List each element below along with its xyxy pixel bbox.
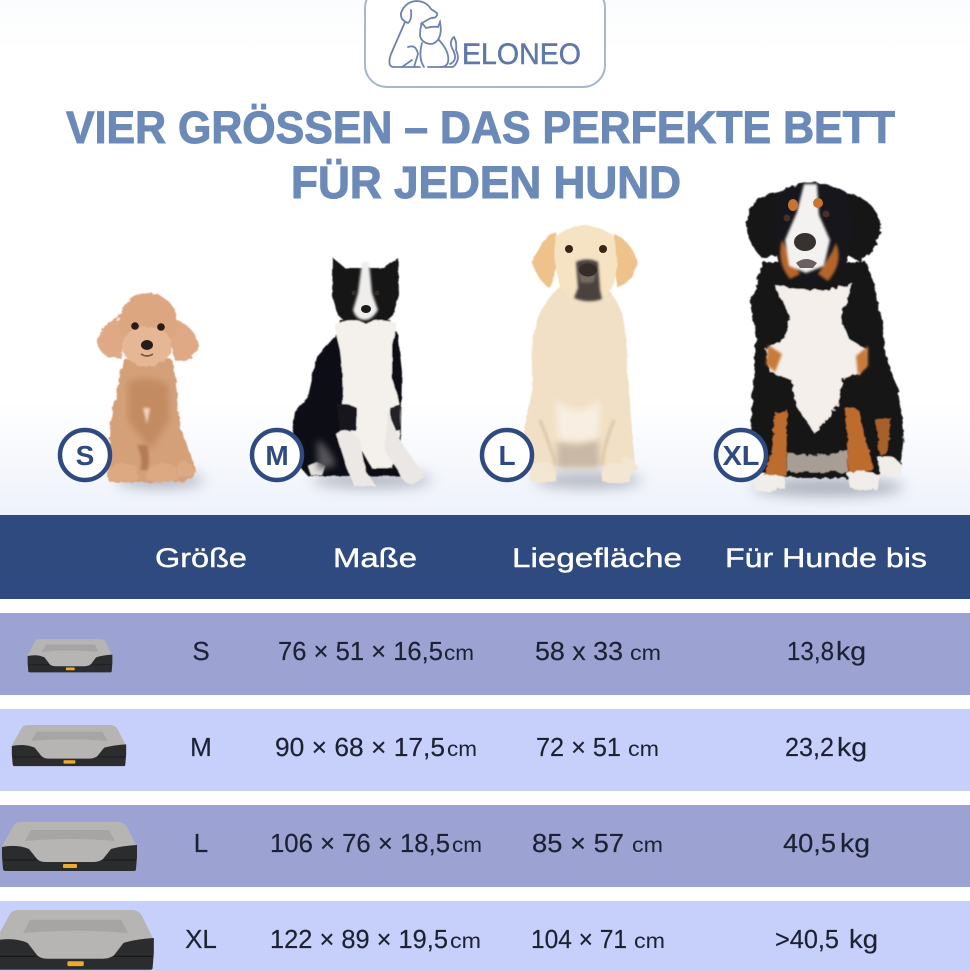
row XL: 122 × 89 × 19,5	[270, 924, 448, 954]
row M: kg	[837, 732, 867, 762]
row L: cm	[452, 834, 482, 857]
row L: 106 × 76 × 18,5	[270, 828, 450, 858]
row M: cm	[628, 738, 659, 761]
row M: M	[190, 732, 212, 762]
row S	[0, 613, 970, 695]
row L: 85 × 57	[532, 828, 624, 858]
dog L: labrador	[525, 226, 642, 488]
row L	[0, 805, 970, 887]
row S: S	[192, 636, 210, 666]
row S: cm	[444, 642, 474, 665]
row XL: XL	[185, 924, 217, 954]
table header: Größe	[155, 543, 247, 573]
white area behind table	[0, 515, 970, 971]
page background	[0, 0, 970, 515]
row L: L	[194, 828, 208, 858]
row L: cm	[632, 834, 663, 857]
table header: Maße	[333, 543, 417, 573]
row M: 90 × 68 × 17,5	[275, 732, 445, 762]
row M: 72 × 51	[536, 732, 621, 762]
row M: cm	[447, 738, 477, 761]
dog S: poodle	[98, 293, 204, 488]
dog XL: bernese mountain dog	[746, 183, 904, 496]
row S: 76 × 51 × 16,5	[278, 636, 443, 666]
badge L: L	[498, 440, 516, 471]
bed M	[12, 725, 126, 766]
badge M	[252, 430, 302, 480]
bed XL	[0, 910, 154, 970]
bed L	[2, 822, 137, 871]
row S: 13,8	[787, 636, 834, 666]
row XL: cm	[450, 930, 481, 953]
row XL: cm	[634, 930, 665, 953]
bed S	[28, 639, 112, 672]
badge M: M	[265, 440, 289, 471]
row XL: >40,5	[775, 924, 839, 954]
row S: cm	[630, 642, 661, 665]
dog M: border collie	[292, 258, 432, 488]
table header	[0, 515, 970, 599]
row XL: 104 × 71	[531, 924, 627, 954]
row XL: kg	[849, 924, 878, 954]
row M: 23,2	[785, 732, 834, 762]
badge L	[482, 430, 532, 480]
badge XL	[716, 430, 766, 480]
badge XL: XL	[722, 440, 760, 471]
title	[66, 102, 895, 208]
logo	[365, 0, 605, 87]
table header: Liegefläche	[512, 543, 682, 573]
row L: 40,5	[783, 828, 836, 858]
table header: Für Hunde bis	[725, 543, 927, 573]
row S: 58 x 33	[535, 636, 623, 666]
badge S: S	[76, 440, 94, 471]
icon: dog and cat	[389, 1, 458, 67]
badge S	[60, 430, 110, 480]
row L: kg	[840, 828, 870, 858]
row S: kg	[836, 636, 866, 666]
row M	[0, 709, 970, 791]
logo wordmark: ELONEO	[462, 38, 581, 71]
title: VIER GRÖSSEN – DAS PERFEKTE BETT	[66, 102, 895, 153]
title: FÜR JEDEN HUND	[291, 157, 681, 208]
row XL	[0, 901, 970, 971]
